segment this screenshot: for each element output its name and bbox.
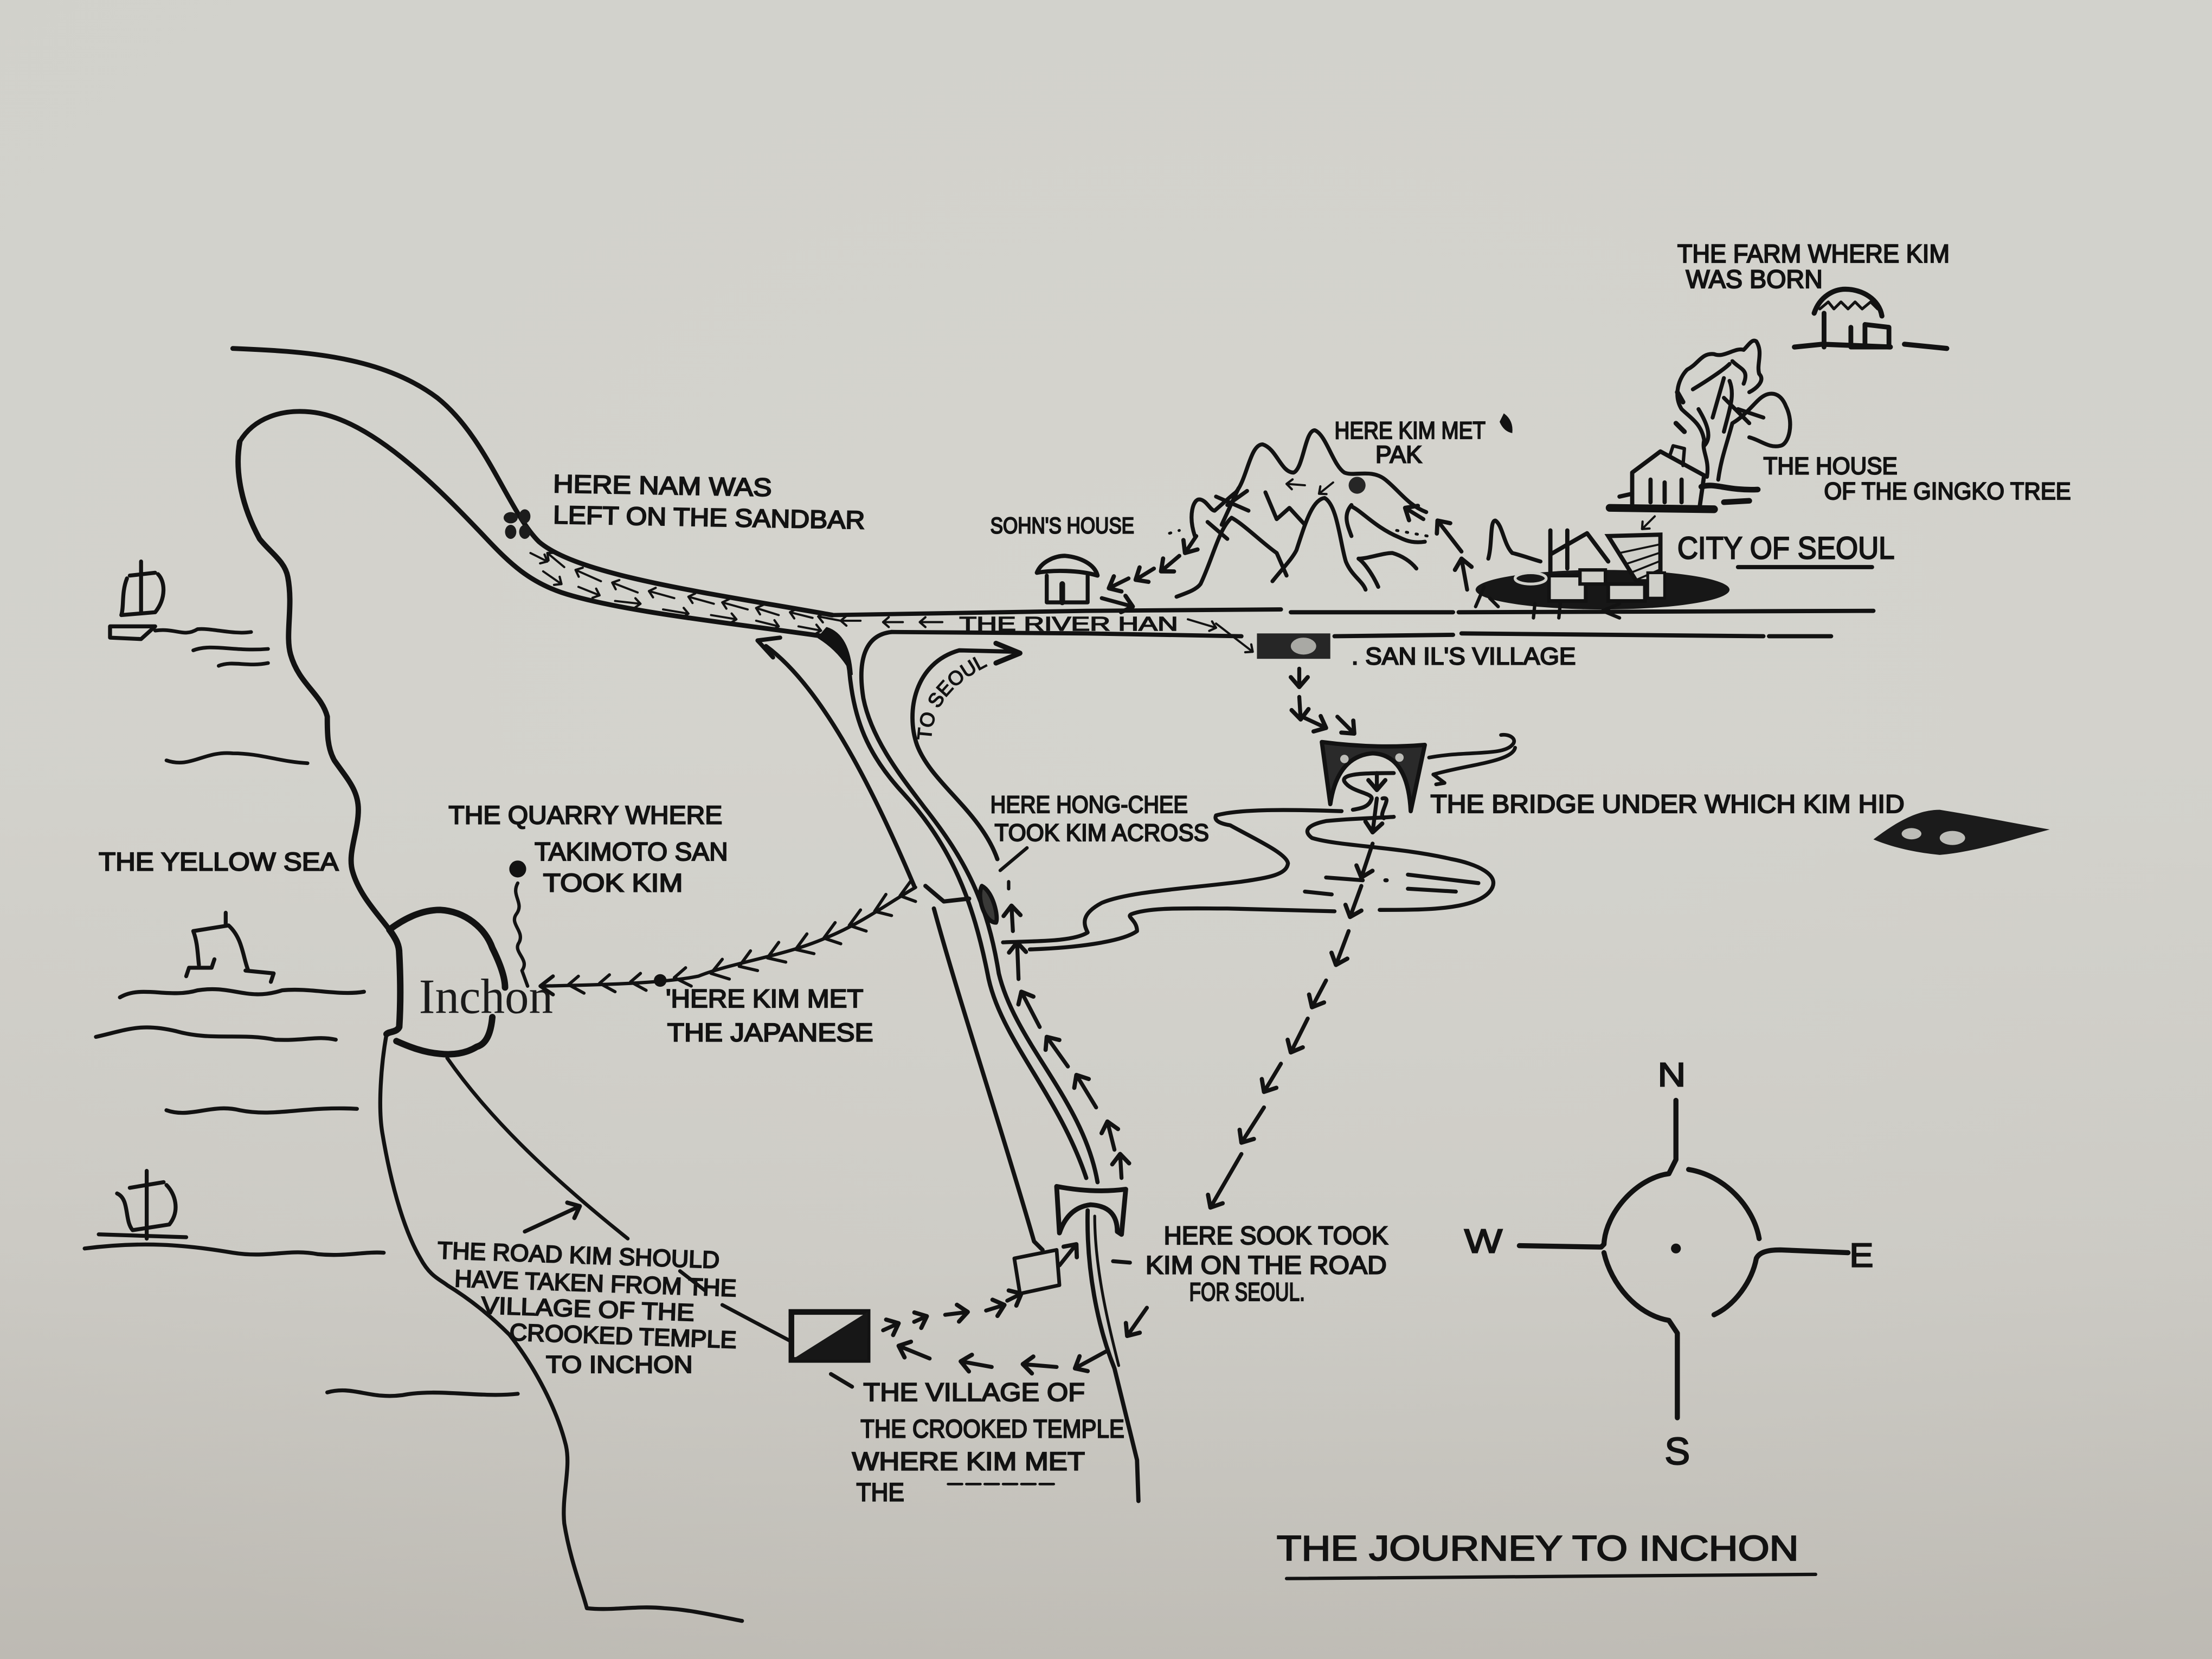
route arrows: sandbar trail on the estuary [530,553,1253,652]
route: wiggle to the quarry [509,860,528,986]
label: the village of the crooked temple [852,1378,1124,1507]
label: here Kim met Pak: HERE KIM MET [1335,417,1486,444]
label: the village of the crooked temple: WHERE KIM MET [852,1447,1085,1475]
label: the quarry: TOOK KIM [543,869,683,897]
label: the road Kim should have taken: TO INCHON [546,1352,693,1378]
river fork and tributary lines [818,628,1097,1182]
label: here Nam was left on the sandbar: HERE NAM WAS [553,470,772,501]
coastline and Han estuary [233,349,832,1621]
road branch at the ferry [925,886,969,902]
label: the road Kim should have taken: HAVE TAKEN FROM THE [454,1265,737,1302]
icon: lower bridge [1057,1186,1126,1234]
label: the farm where Kim was born: WAS BORN [1686,265,1823,293]
route arrows: temple to the lower bridge [883,1244,1076,1330]
label: the farm where Kim was born [1677,240,1950,293]
label: city of Seoul: CITY OF SEOUL [1677,531,1895,565]
label: here Nam was left on the sandbar [553,470,865,534]
road Kim should have taken [447,1058,792,1342]
short leader dashes [831,1261,1130,1387]
waves beside the middle ship [96,989,364,1113]
label: the road Kim should have taken: CROOKED TEMPLE [509,1319,737,1354]
title: the journey to Inchon: THE JOURNEY TO INCHON [1277,1528,1799,1568]
river Han banks [832,609,1874,636]
label: here Nam was left on the sandbar: LEFT ON THE SANDBAR [553,500,865,534]
route arrows: bridge south to the road [1211,931,1349,1207]
label: here Sook took Kim on the road for Seoul: HERE SOOK TOOK [1164,1221,1388,1250]
icon: city of Seoul [1476,516,1729,618]
label: the village of the crooked temple: THE VILLAGE OF [863,1378,1085,1406]
label: the quarry: THE QUARRY WHERE [448,801,722,829]
route arrows: Sohn's house and mountains [1102,508,1467,607]
icon: dark lozenge shape on the right [1874,810,2050,855]
label: the road Kim should have taken: VILLAGE OF THE [481,1293,695,1326]
label: here Sook took Kim on the road for Seoul: FOR SEOUL. [1189,1278,1305,1306]
icon: mountains where Kim met Pak [1169,430,1540,597]
route arrows: north along the river [1012,906,1122,1178]
arrow and label: to Seoul: TO SEOUL [917,657,988,740]
route arrows: river back to the temple [899,1308,1147,1368]
label: the quarry: TAKIMOTO SAN [535,838,728,866]
waves beside the south ship and lower sea [85,1244,518,1396]
label: here Hong-Chee took Kim across: TOOK KIM ACROSS [994,820,1209,846]
icon: Sohn's hut [1037,556,1097,602]
icon: small house block [1014,1250,1059,1294]
label: the house of the gingko tree [1764,453,2071,505]
Inchon harbour ring [387,910,505,1054]
label: the Yellow Sea: THE YELLOW SEA [99,847,339,876]
label: Sohn's house: SOHN'S HOUSE [991,513,1134,538]
label: the road Kim should have taken: THE ROAD KIM SHOULD [437,1237,720,1274]
road from the fork to the small house [757,638,1043,1250]
label: the river Han: THE RIVER HAN [959,613,1178,635]
compass rose [1464,1056,1874,1472]
leader: Hong-Chee crossing [1000,848,1027,889]
arrow and label: to Seoul [910,641,1023,861]
label: the village of the crooked temple: THE CROOKED TEMPLE [860,1414,1124,1443]
label: here Hong-Chee took Kim across: HERE HONG-CHEE [991,792,1188,818]
label: Inchon: Inchon [419,969,553,1024]
icon: farm where Kim was born [1795,289,1947,349]
label: here Sook took Kim on the road for Seoul: KIM ON THE ROAD [1146,1251,1387,1279]
label: the village of the crooked temple: THE [856,1478,904,1507]
label: the quarry [448,801,728,897]
label: the house of the gingko tree: OF THE GINGKO TREE [1824,478,2071,505]
icon: sandbar where Nam was left [504,509,530,539]
compass rose: S [1664,1430,1690,1472]
icon: sailing ship, north [110,562,164,639]
label: the road Kim should have taken [437,1237,737,1378]
icon: sailing ship, south [99,1171,186,1239]
icon: ferry crossing on the river [980,886,996,923]
label: here Hong-Chee took Kim across [991,792,1209,846]
icon: San Il's village [1257,633,1330,659]
stream winding from the bridge [1003,773,1494,949]
label: San Il's village: . SAN IL'S VILLAGE [1352,644,1576,670]
icon: house of the gingko tree [1610,446,1758,509]
compass rose: N [1657,1056,1686,1094]
lower river line [1088,1211,1139,1501]
route arrows: San Il's village to the bridge [1299,668,1377,917]
label: here Kim met the Japanese [666,985,873,1046]
label: here Sook took Kim on the road for Seoul [1146,1221,1388,1306]
icon: village of the crooked temple [792,1312,867,1360]
label: here Kim met the Japanese: 'HERE KIM MET [666,985,863,1013]
label: here Kim met Pak [1335,417,1486,468]
icon: sailing ship, middle [186,913,274,982]
label: the bridge under which Kim hid: THE BRIDGE UNDER WHICH KIM HID [1430,790,1905,818]
illegible dash word [948,1483,1055,1484]
mark beside Pak label [1500,413,1513,433]
waves beside the north ship [155,629,307,763]
route: from the river to Inchon past the Japanese [541,880,916,994]
arrow: pointing to the road [525,1206,580,1232]
compass rose: W [1464,1223,1502,1261]
icon: the bridge where Kim hid [1322,735,1515,811]
label: the farm where Kim was born: THE FARM WHERE KIM [1677,240,1950,268]
label: here Kim met Pak: PAK [1375,441,1422,468]
icon: gingko tree [1676,340,1790,480]
title: the journey to Inchon [1277,1528,1816,1579]
label: here Kim met the Japanese: THE JAPANESE [667,1018,873,1046]
compass rose: E [1849,1237,1874,1275]
label: the house of the gingko tree: THE HOUSE [1764,453,1898,479]
